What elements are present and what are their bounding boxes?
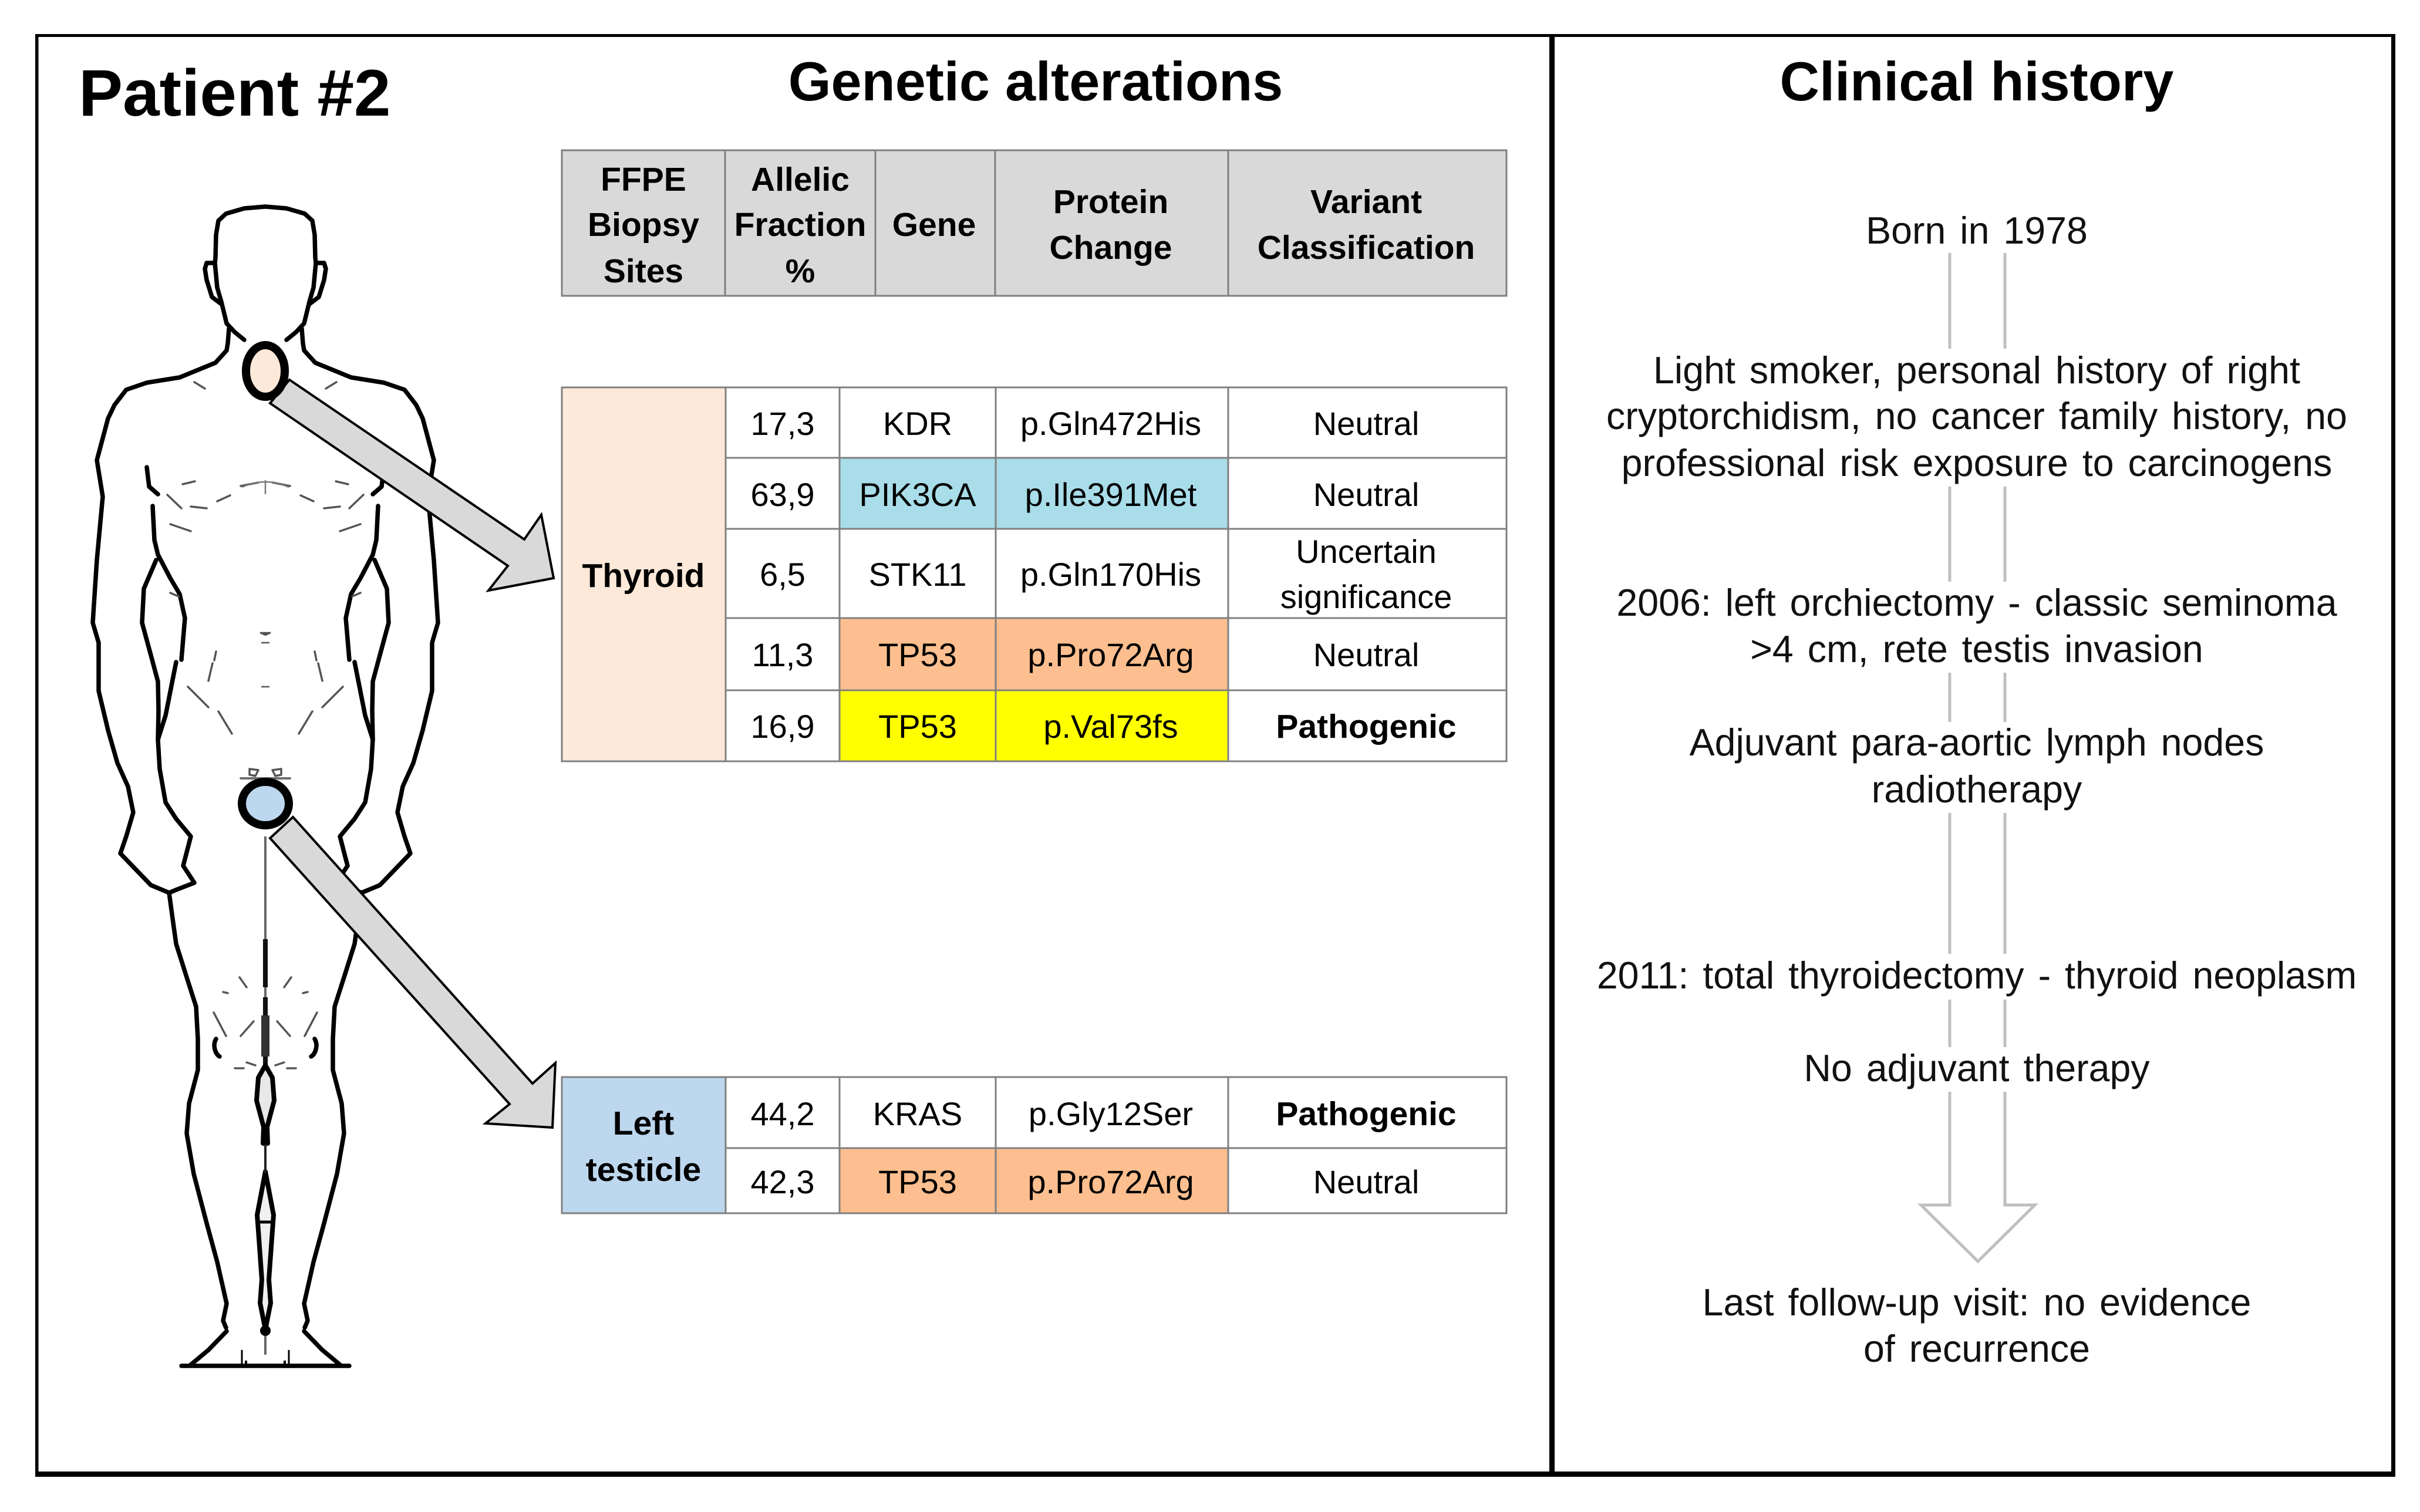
text: clinical history events: No adjuvant therapy xyxy=(1804,1047,2150,1089)
table: thyroid variants xyxy=(562,387,1506,761)
table: thyroid variants: Uncertain xyxy=(1296,533,1437,570)
table: header row: Variant xyxy=(1310,183,1422,221)
table: thyroid variants: PIK3CA xyxy=(859,476,976,513)
arrow: thyroid to table xyxy=(270,380,554,590)
text: clinical history events: cryptorchidism, no cancer family history, no xyxy=(1606,395,2347,437)
table: left testicle variants: 44,2 xyxy=(750,1095,815,1132)
table: thyroid variants: p.Gln170His xyxy=(1020,556,1201,593)
central axis of the legs xyxy=(241,480,290,1366)
table: header row xyxy=(562,150,1506,296)
table: header row: Classification xyxy=(1258,229,1475,266)
table: thyroid variants: p.Ile391Met xyxy=(1025,476,1197,513)
table: thyroid variants: TP53 xyxy=(878,708,957,745)
table: thyroid variants: Pathogenic xyxy=(1276,708,1457,745)
table: left testicle variants xyxy=(562,1077,1506,1213)
table: thyroid variants: 16,9 xyxy=(750,708,815,745)
table: header row: FFPE xyxy=(601,161,686,198)
table: left testicle variants: Neutral xyxy=(1313,1163,1419,1200)
arrow: testicle to table xyxy=(270,817,555,1128)
table: header row: Gene xyxy=(892,206,976,244)
table: header row: Protein xyxy=(1053,183,1168,221)
table: thyroid variants: STK11 xyxy=(868,556,967,593)
table: header row: Allelic xyxy=(751,161,850,198)
text: clinical history events: professional risk exposure to carcinogens xyxy=(1622,442,2332,484)
table: left testicle variants: p.Gly12Ser xyxy=(1029,1095,1193,1132)
text: clinical history events: radiotherapy xyxy=(1872,768,2082,811)
table: thyroid variants: 17,3 xyxy=(750,405,815,442)
table: header row: Sites xyxy=(604,252,683,290)
table: thyroid variants: Neutral xyxy=(1313,476,1419,513)
table: left testicle variants: 42,3 xyxy=(750,1163,815,1200)
table: left testicle variants: Left xyxy=(613,1105,674,1142)
text: clinical history events xyxy=(1597,210,2357,1370)
table: thyroid variants: Neutral xyxy=(1313,636,1419,673)
table: thyroid variants: 63,9 xyxy=(750,476,815,513)
table: left testicle variants: Pathogenic xyxy=(1276,1095,1457,1133)
text: clinical history events: 2011: total thyroidectomy - thyroid neoplasm xyxy=(1597,954,2357,997)
table: thyroid variants: Neutral xyxy=(1313,405,1419,442)
table: left testicle variants: TP53 xyxy=(878,1163,957,1200)
table: left testicle variants: p.Pro72Arg xyxy=(1027,1163,1194,1200)
arrow: clinical timeline xyxy=(1921,253,2035,1261)
marker: testicle site xyxy=(242,782,289,825)
table: left testicle variants: KRAS xyxy=(873,1095,962,1132)
table: thyroid variants: p.Val73fs xyxy=(1043,708,1178,745)
table: left testicle variants: testicle xyxy=(586,1151,701,1189)
table: header row: Change xyxy=(1049,229,1172,266)
text: clinical history events: Born in 1978 xyxy=(1866,210,2088,252)
table: header row: Fraction xyxy=(734,206,866,244)
table: thyroid variants: 6,5 xyxy=(760,556,805,593)
table: thyroid variants: KDR xyxy=(883,405,952,442)
table: thyroid variants: p.Gln472His xyxy=(1020,405,1201,442)
title: Patient #2: Patient #2 xyxy=(79,56,390,130)
text: clinical history events: Last follow-up visit: no evidence xyxy=(1703,1281,2251,1324)
marker: thyroid site xyxy=(246,345,285,397)
table: thyroid variants: 11,3 xyxy=(752,636,813,673)
table: thyroid variants: Thyroid xyxy=(582,557,705,595)
heading: Clinical history: Clinical history xyxy=(1780,50,2173,112)
table: header row: % xyxy=(786,252,815,290)
heading: Genetic alterations: Genetic alterations xyxy=(788,50,1283,112)
text: clinical history events: Light smoker, personal history of right xyxy=(1653,349,2300,392)
text: clinical history events: of recurrence xyxy=(1863,1328,2090,1370)
icon: human body outline xyxy=(93,207,438,1366)
table: header row: Biopsy xyxy=(588,206,699,244)
table: thyroid variants: TP53 xyxy=(878,636,957,673)
text: clinical history events: >4 cm, rete testis invasion xyxy=(1750,628,2203,670)
table: thyroid variants: p.Pro72Arg xyxy=(1027,636,1194,673)
table: thyroid variants: significance xyxy=(1280,578,1452,615)
text: clinical history events: 2006: left orchiectomy - classic seminoma xyxy=(1616,582,2337,624)
text: clinical history events: Adjuvant para-aortic lymph nodes xyxy=(1690,721,2264,764)
